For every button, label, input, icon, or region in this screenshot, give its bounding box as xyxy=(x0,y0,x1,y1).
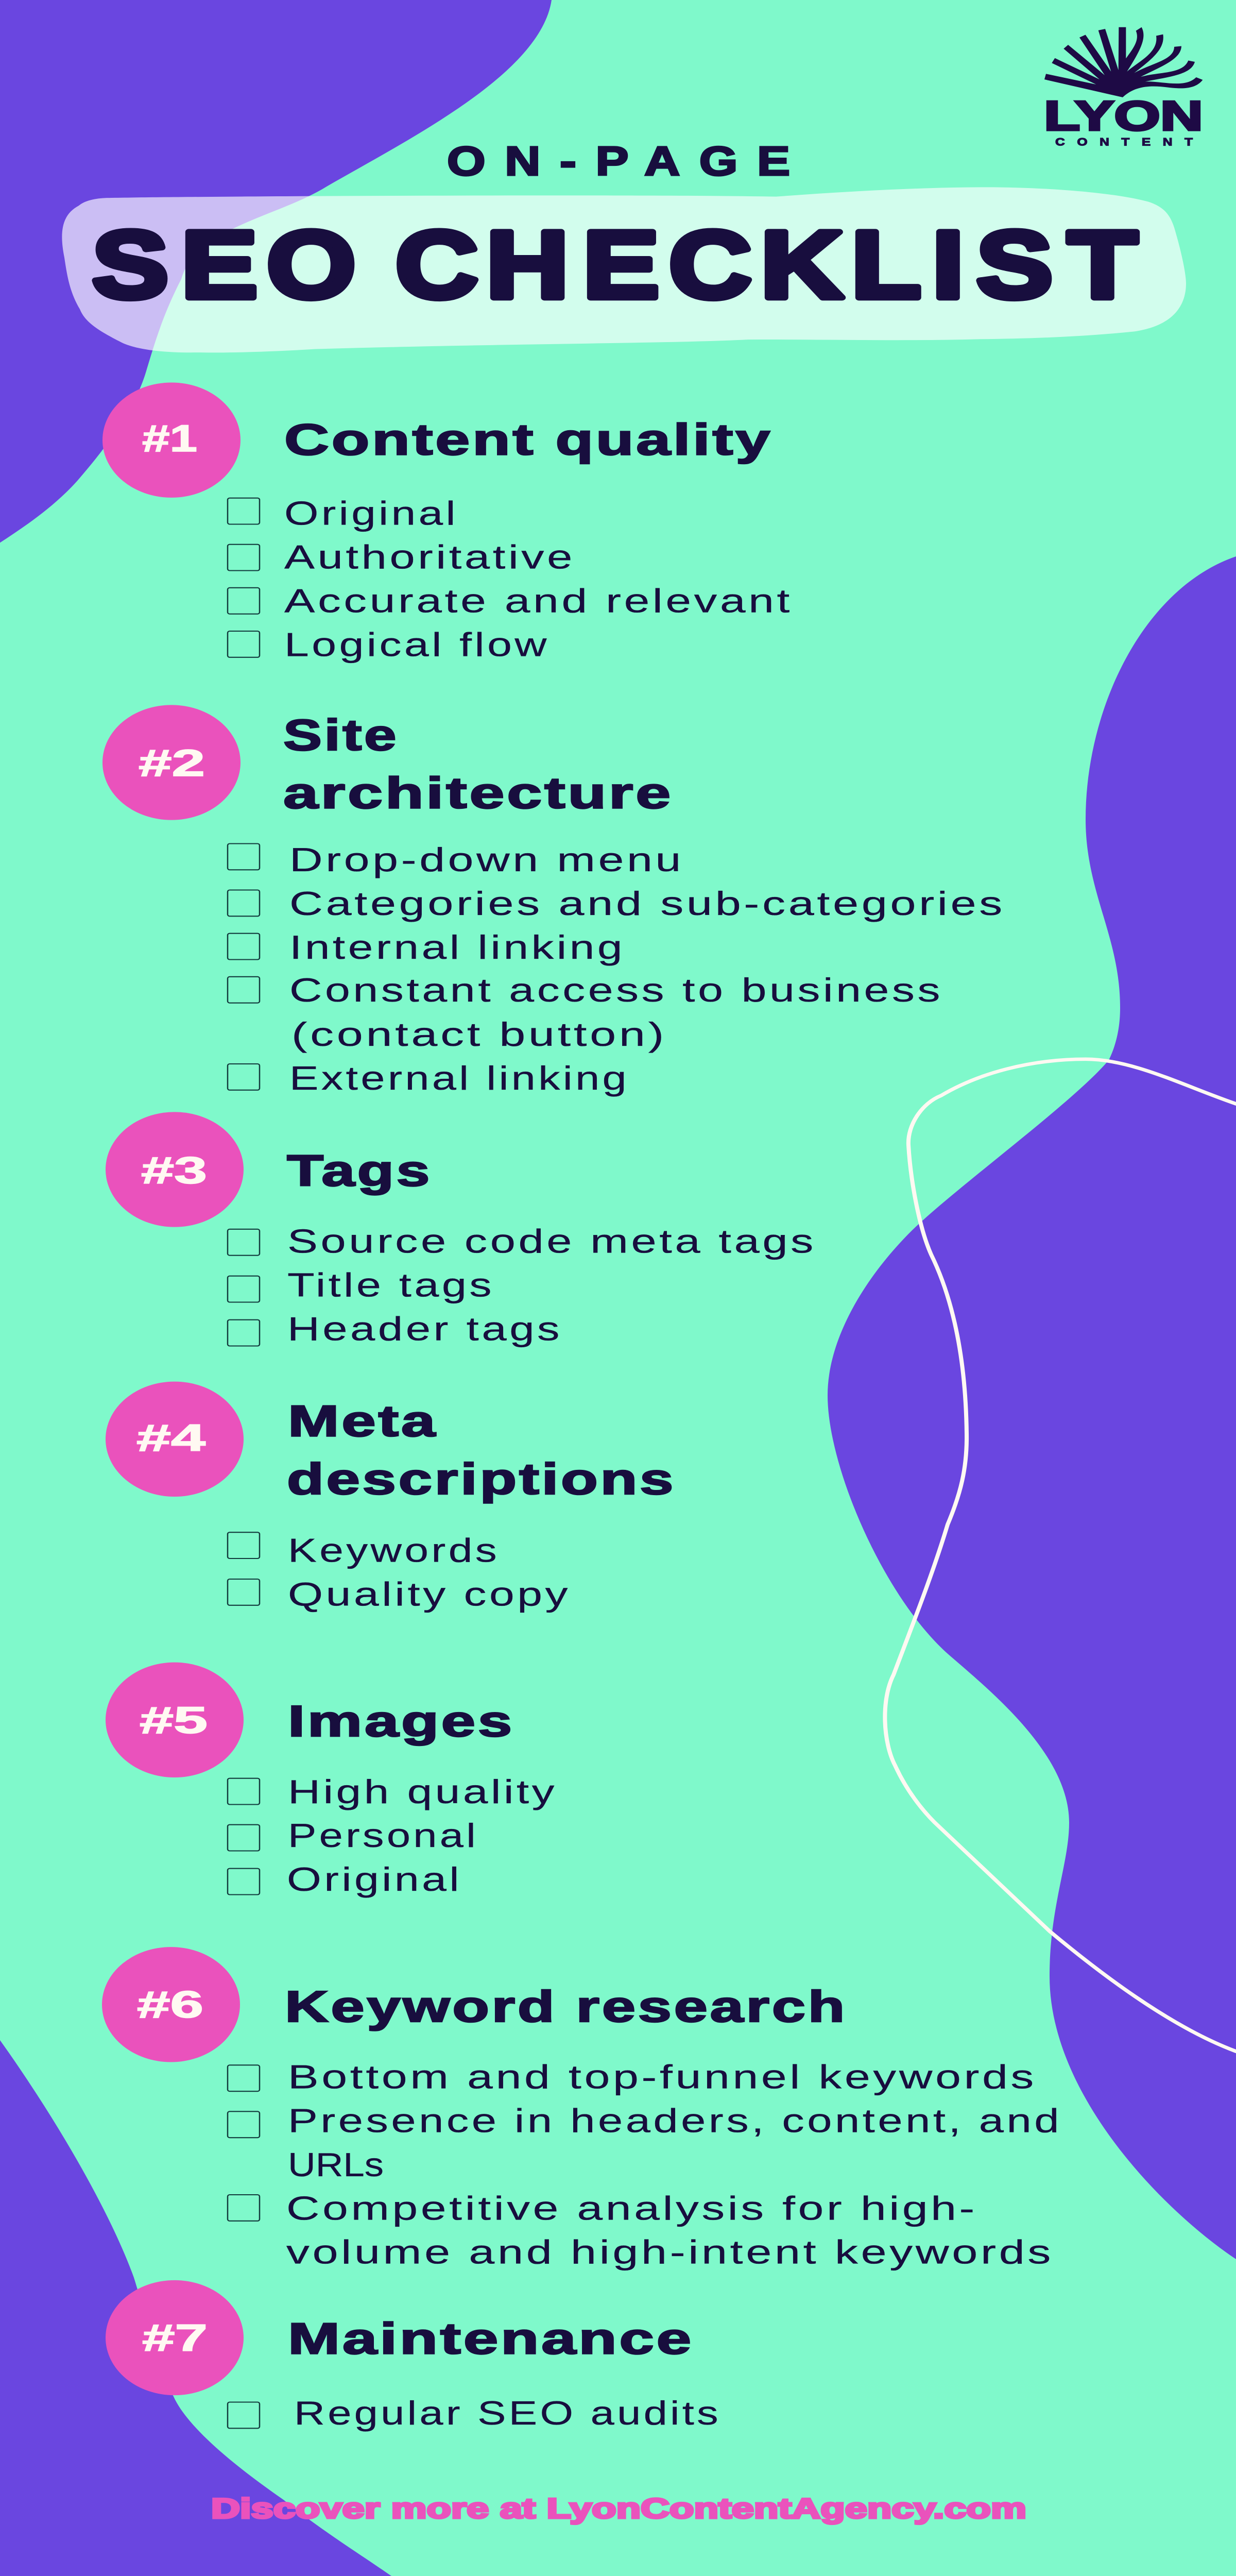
item: original xyxy=(228,1861,462,1898)
item: logical flow: Logical flow xyxy=(284,626,550,664)
badge #4 xyxy=(106,1382,244,1497)
item: constant access to business: Constant access to business xyxy=(289,972,943,1009)
heading: descriptions: descriptions xyxy=(287,1454,676,1503)
badge #6 xyxy=(102,1947,240,2062)
badge #5 xyxy=(106,1663,244,1777)
footer call to action: Discover more at LyonContentAgency.com xyxy=(211,2493,1026,2524)
item: presence in headers, content, and urls xyxy=(228,2102,1062,2184)
badge #2 xyxy=(102,705,241,820)
heading: meta: Meta xyxy=(288,1397,438,1446)
item: constant access to business xyxy=(228,972,943,1053)
badge #6: #6 xyxy=(137,1984,203,2026)
heading: on-page: ON-PAGE xyxy=(447,138,790,184)
decorative white outline curve xyxy=(885,1059,1236,2052)
title highlight blob xyxy=(62,187,1186,352)
item: authoritative: Authoritative xyxy=(284,538,575,576)
panel: section 7 maintenance xyxy=(106,2280,721,2432)
item: categories and sub-categories: Categories and sub-categories xyxy=(289,885,1005,922)
blob: top left purple xyxy=(0,0,552,543)
item: high quality: High quality xyxy=(288,1773,557,1810)
panel: section 4 meta descriptions xyxy=(106,1382,676,1613)
badge #7 xyxy=(106,2280,244,2395)
wordmark: LYON: LYON xyxy=(1044,92,1203,139)
badge #1: #1 xyxy=(142,418,197,460)
heading: images: Images xyxy=(288,1697,514,1745)
heading: site: Site xyxy=(283,710,399,759)
item: internal linking: Internal linking xyxy=(289,929,625,966)
item: header tags: Header tags xyxy=(287,1311,562,1348)
badge #3 xyxy=(106,1112,244,1227)
item: source code meta tags: Source code meta tags xyxy=(287,1223,816,1260)
heading: architecture: architecture xyxy=(283,768,673,817)
badge #4: #4 xyxy=(136,1417,205,1459)
item: constant access to business: (contact button) xyxy=(291,1016,667,1053)
badge #5: #5 xyxy=(140,1700,208,1741)
item: competitive analysis: Competitive analysis for high- xyxy=(286,2190,977,2227)
blob: right purple xyxy=(828,556,1236,2259)
badge #1 xyxy=(102,382,241,498)
panel: section 5 images xyxy=(106,1663,557,1898)
logo: Lyon Content xyxy=(1044,27,1203,148)
icon: open book rays xyxy=(1044,27,1203,97)
heading: tags: Tags xyxy=(287,1146,432,1195)
item: competitive analysis xyxy=(228,2190,1054,2271)
badge #7: #7 xyxy=(142,2317,208,2359)
item: presence in headers, content, and urls: URLs xyxy=(288,2146,384,2184)
title: SEO CHECKLIST xyxy=(92,212,1138,318)
item: presence in headers, content, and urls: Presence in headers, content, and xyxy=(288,2102,1062,2140)
item: original: Original xyxy=(287,1861,462,1898)
item: bottom and top-funnel keywords: Bottom and top-funnel keywords xyxy=(288,2058,1037,2096)
wordmark: CONTENT: CONTENT xyxy=(1055,135,1193,148)
item: accurate and relevant: Accurate and relevant xyxy=(284,582,793,620)
item: quality copy: Quality copy xyxy=(288,1576,571,1613)
item: external linking: External linking xyxy=(289,1060,629,1097)
item: personal: Personal xyxy=(288,1817,478,1854)
item: original xyxy=(228,495,458,532)
panel: section 3 tags xyxy=(106,1112,816,1348)
item: regular seo audits: Regular SEO audits xyxy=(294,2395,721,2432)
panel: section 2 site architecture xyxy=(102,705,1005,1097)
item: keywords: Keywords xyxy=(288,1532,500,1569)
item: original: Original xyxy=(284,495,458,532)
blob: bottom left purple xyxy=(0,2040,391,2576)
badge #2: #2 xyxy=(139,742,205,784)
item: competitive analysis: volume and high-intent keywords xyxy=(286,2233,1054,2271)
heading: keyword research: Keyword research xyxy=(285,1982,847,2031)
item: title tags: Title tags xyxy=(287,1267,494,1304)
heading: content quality: Content quality xyxy=(284,415,772,464)
badge #3: #3 xyxy=(141,1149,207,1192)
heading: maintenance: Maintenance xyxy=(288,2314,694,2363)
item: drop-down menu: Drop-down menu xyxy=(289,841,684,878)
panel: section 6 keyword research xyxy=(102,1947,1062,2271)
panel: section 1 content quality xyxy=(102,382,793,664)
